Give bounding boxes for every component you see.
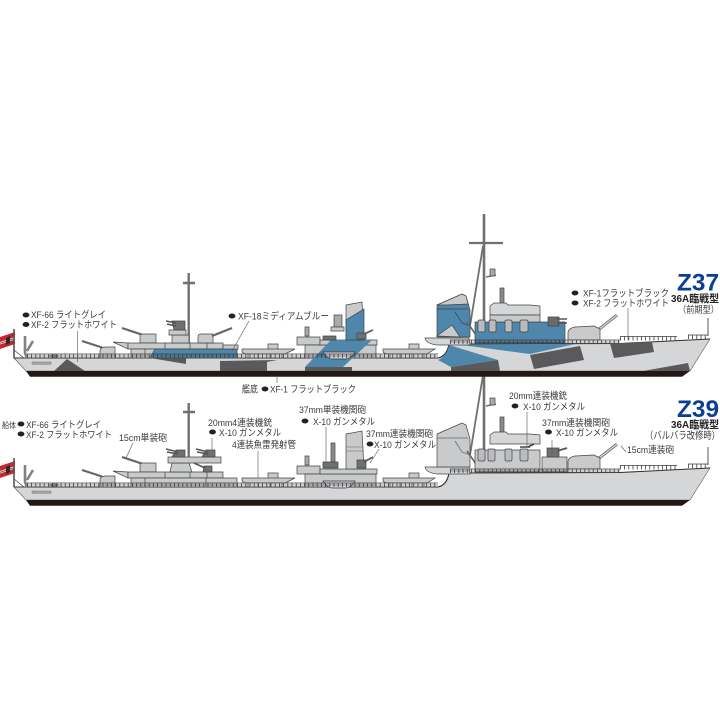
- camouflage on midships: Z37: [305, 340, 372, 371]
- leader lines: [78, 308, 628, 478]
- title: Z37: Z37: [677, 270, 719, 296]
- label: 20mm quad gun: [208, 417, 281, 439]
- label: 20mm twin gun: 20mm連装機銃: [509, 390, 567, 402]
- label: Z37 medium blue: XF-18ミディアムブルー: [238, 310, 329, 322]
- mast: aft Z37: [183, 273, 195, 343]
- label: 37mm twin gun aft: X-10 ガンメタル: [374, 440, 436, 451]
- label: 37mm twin gun aft: [366, 428, 436, 451]
- bridge: Z39: [437, 423, 476, 467]
- stern flag and davits: Z39: [0, 458, 59, 487]
- labels: Z37 stern paint: XF-2 フラットホワイト: [31, 320, 117, 331]
- title: Z37: [671, 270, 719, 316]
- forward deckhouse: Z37: [475, 315, 567, 343]
- aft 15cm turrets and deckhouse: Z39: [82, 457, 237, 487]
- title: Z39: Z39: [677, 396, 719, 423]
- bridge: Z37: [437, 294, 476, 337]
- labels: Z39 hull paint: XF-2 フラットホワイト: [26, 430, 112, 441]
- hull: Z37: [14, 339, 710, 377]
- ship: Z37: [0, 214, 710, 377]
- label: 15cm twin gun: 15cm連装砲: [627, 444, 674, 456]
- label: ship bottom paint: 艦底: [242, 384, 258, 396]
- torpedo tubes: Z39 forward: [383, 473, 435, 487]
- title: Z39: [645, 396, 720, 442]
- mast: aft Z39: [183, 403, 195, 472]
- labels: Z37 bow paint: XF-1フラットブラック: [583, 288, 669, 300]
- torpedo tubes: Z37 forward: [383, 344, 435, 358]
- label: 37mm twin gun forward: 37mm連装機関砲: [542, 417, 610, 429]
- torpedo tubes: Z39: [242, 473, 295, 487]
- midships house: Z39: [297, 456, 377, 487]
- aft 15cm turrets and deckhouse: Z37: [82, 328, 237, 358]
- label: 37mm single gun: [299, 404, 375, 428]
- label: ship bottom paint: XF-1 フラットブラック: [270, 384, 356, 396]
- forward turret: Z39: [568, 444, 708, 469]
- label: ship bottom paint: [242, 384, 356, 396]
- labels: Z37 stern paint: [23, 309, 117, 331]
- labels: Z39 hull paint: XF-66 ライトグレイ: [26, 419, 101, 431]
- label: 37mm twin gun forward: [542, 417, 618, 439]
- labels: Z39 hull paint: 船体: [2, 420, 16, 430]
- 20mm quad platform: Z39: [166, 449, 221, 472]
- label: torpedo tubes: 4連装魚雷発射管: [232, 439, 296, 451]
- labels: Z37 bow paint: XF-2 フラットホワイト: [583, 298, 669, 310]
- railings: Z37: [27, 335, 708, 356]
- bridge and foremast: Z37: [425, 214, 540, 345]
- label: 37mm twin gun aft: 37mm連装機関砲: [366, 428, 433, 440]
- aft funnel: Z39: [323, 431, 373, 469]
- label: 20mm quad gun: 20mm4連装機銃: [208, 417, 272, 429]
- hull camouflage: Z37: [54, 342, 690, 371]
- aft funnel: Z37: [323, 302, 373, 340]
- label: 37mm twin gun forward: X-10 ガンメタル: [556, 428, 618, 439]
- ship: Z39: [0, 343, 710, 506]
- railings: Z39: [27, 464, 708, 485]
- stern flag and davits: Z37: [0, 329, 59, 358]
- label: 20mm twin gun: [509, 390, 585, 413]
- boat: Z37: [323, 352, 355, 359]
- label: 20mm quad gun: X-10 ガンメタル: [219, 428, 281, 439]
- labels: Z37 bow paint: [572, 288, 669, 310]
- midships house: Z37: [297, 327, 377, 358]
- torpedo tubes: Z37: [242, 344, 295, 358]
- aft gun mount group: Z37: [150, 321, 238, 358]
- labels: Z39 hull paint: [2, 419, 112, 441]
- forward turret: Z37: [568, 315, 708, 340]
- labels: Z37 stern paint: XF-66 ライトグレイ: [31, 309, 106, 321]
- boat: Z39: [323, 481, 355, 488]
- label: 37mm single gun: 37mm単装機関砲: [299, 404, 366, 416]
- label: 37mm single gun: X-10 ガンメタル: [313, 417, 375, 428]
- label: 20mm twin gun: X-10 ガンメタル: [523, 402, 585, 413]
- label: 15cm single gun: 15cm単装砲: [119, 432, 167, 444]
- bridge and foremast: Z39: [425, 343, 540, 474]
- forward deckhouse: Z39: [475, 444, 567, 472]
- hull: Z39: [14, 468, 710, 506]
